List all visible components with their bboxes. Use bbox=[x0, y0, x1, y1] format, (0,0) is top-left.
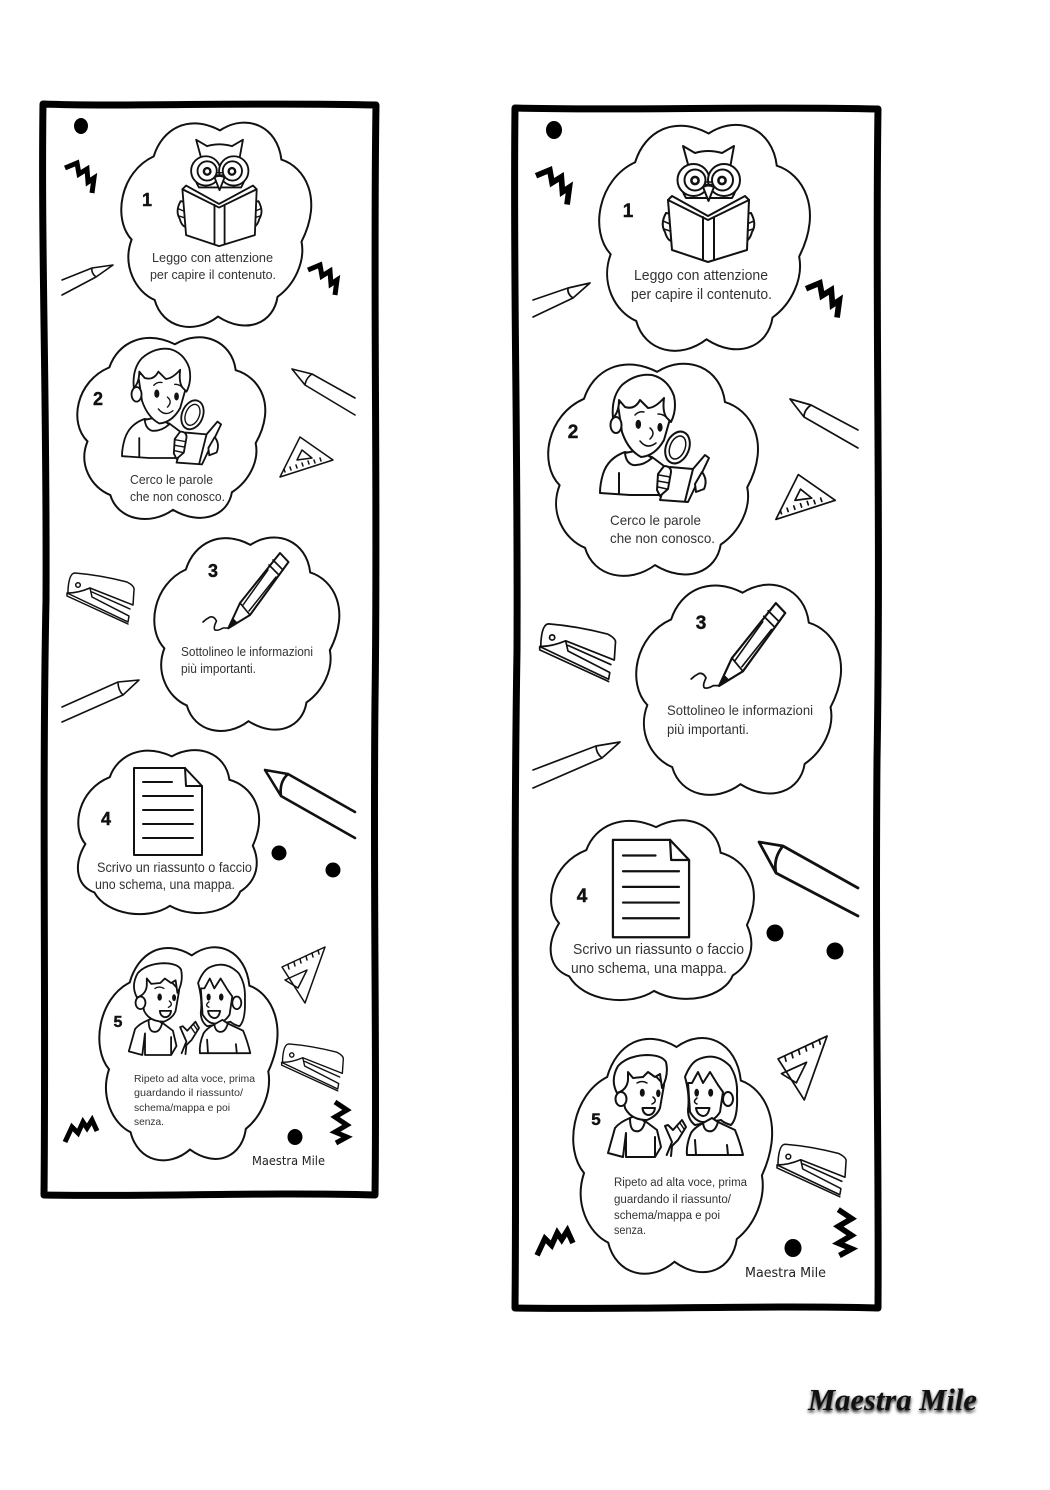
step 2 cloud bbox=[548, 364, 758, 576]
step 3 cloud bbox=[636, 585, 841, 795]
caption 5: senza. bbox=[614, 1225, 646, 1237]
number 4: 4 bbox=[101, 809, 111, 829]
caption 2: che non conosco. bbox=[610, 530, 715, 546]
icon: pencil writing bbox=[691, 603, 785, 688]
caption 1: per capire il contenuto. bbox=[150, 267, 276, 282]
caption 5: schema/mappa e poi bbox=[134, 1102, 230, 1114]
caption 4: uno schema, una mappa. bbox=[571, 960, 727, 977]
step 5 cloud bbox=[99, 947, 277, 1160]
number 5: 5 bbox=[114, 1014, 123, 1031]
icon: document bbox=[134, 768, 202, 855]
panel: left bookmark bbox=[43, 104, 376, 1195]
step 5 cloud bbox=[573, 1038, 772, 1274]
caption 5: schema/mappa e poi bbox=[614, 1210, 720, 1222]
icon: pencil 2 bbox=[292, 369, 355, 415]
decoration: zigzag right of step 1 bbox=[308, 265, 337, 295]
icon: stapler 1 bbox=[67, 573, 134, 624]
number 2: 2 bbox=[93, 389, 103, 409]
icon: owl reading bbox=[663, 146, 754, 262]
icon: stapler 2 bbox=[282, 1044, 343, 1091]
frame: left bookmark border bbox=[43, 104, 376, 1195]
icon: owl reading bbox=[178, 140, 262, 246]
icon: pencil 3 bbox=[533, 742, 620, 788]
decoration: zigzag bottom right bbox=[335, 1102, 347, 1143]
cloud shape bbox=[121, 123, 311, 327]
decoration: zigzag bottom right bbox=[838, 1210, 852, 1256]
step 4 cloud bbox=[78, 750, 259, 914]
cloud shape bbox=[599, 125, 810, 351]
step 2 cloud bbox=[77, 337, 265, 519]
icon: stapler 1 bbox=[540, 624, 616, 682]
caption 3: Sottolineo le informazioni bbox=[667, 702, 813, 718]
icon: set square 1 bbox=[280, 437, 333, 477]
cloud shape bbox=[573, 1038, 772, 1274]
icon: pencil 4 bbox=[265, 770, 355, 838]
number 1: 1 bbox=[623, 201, 634, 222]
icon: boy with magnifier bbox=[600, 375, 709, 502]
decoration: right dots bbox=[546, 121, 844, 1257]
icon: pencil writing bbox=[203, 553, 288, 630]
decoration: zigzag bottom left bbox=[537, 1231, 573, 1255]
decoration: zigzag right of step 1 bbox=[806, 283, 839, 318]
icon: pencil 4 bbox=[759, 842, 858, 916]
caption 5: Ripeto ad alta voce, prima bbox=[134, 1073, 255, 1085]
decoration: zigzag top left bbox=[65, 163, 94, 193]
decoration: zigzag bottom left bbox=[65, 1120, 97, 1142]
caption 2: Cerco le parole bbox=[130, 473, 213, 487]
icon: pencil 2 bbox=[790, 399, 858, 448]
caption 3: Sottolineo le informazioni bbox=[181, 645, 313, 659]
icon: two children talking bbox=[608, 1055, 743, 1157]
panel: right bookmark bbox=[515, 108, 878, 1308]
icon: two children talking bbox=[129, 963, 250, 1055]
cloud shape bbox=[551, 820, 754, 1000]
signature: Maestra Mile bbox=[807, 1382, 977, 1417]
caption 2: che non conosco. bbox=[130, 490, 225, 504]
step 1 cloud bbox=[599, 125, 810, 351]
number 2: 2 bbox=[568, 422, 578, 443]
number 3: 3 bbox=[696, 613, 706, 634]
caption 1: Leggo con attenzione bbox=[634, 267, 768, 284]
caption 4: uno schema, una mappa. bbox=[95, 877, 235, 892]
number 3: 3 bbox=[208, 561, 218, 581]
icon: pencil 1 bbox=[62, 265, 113, 295]
signature: Maestra Mile bbox=[807, 1384, 977, 1419]
caption 5: guardando il riassunto/ bbox=[614, 1194, 732, 1206]
number 1: 1 bbox=[142, 190, 152, 210]
caption 3: più importanti. bbox=[181, 662, 256, 676]
caption 1: Leggo con attenzione bbox=[152, 250, 273, 265]
cloud shape bbox=[548, 364, 758, 576]
frame: right bookmark border bbox=[515, 108, 878, 1308]
icon: set square 1 bbox=[776, 475, 835, 519]
caption 5: senza. bbox=[134, 1116, 164, 1128]
cloud shape bbox=[154, 537, 339, 731]
icon: boy with magnifier bbox=[122, 349, 221, 464]
icon: stapler 2 bbox=[777, 1144, 846, 1197]
decoration: left dots bbox=[74, 118, 340, 1145]
icon: set square 2 bbox=[282, 947, 325, 1003]
credit right: Maestra Mile bbox=[745, 1265, 826, 1281]
caption 3: più importanti. bbox=[667, 721, 749, 737]
step 3 cloud bbox=[154, 537, 339, 731]
caption 1: per capire il contenuto. bbox=[631, 286, 772, 303]
number 5: 5 bbox=[591, 1110, 601, 1129]
caption 2: Cerco le parole bbox=[610, 512, 701, 528]
icon: set square 2 bbox=[778, 1036, 827, 1100]
step 1 cloud bbox=[121, 123, 311, 327]
cloud shape bbox=[78, 750, 259, 914]
cloud shape bbox=[636, 585, 841, 795]
caption 4: Scrivo un riassunto o faccio bbox=[97, 860, 252, 875]
icon: pencil 3 bbox=[62, 680, 139, 722]
icon: document bbox=[613, 840, 689, 937]
caption 5: Ripeto ad alta voce, prima bbox=[614, 1177, 748, 1189]
number 4: 4 bbox=[577, 886, 588, 907]
caption 5: guardando il riassunto/ bbox=[134, 1087, 243, 1099]
icon: pencil 1 bbox=[533, 283, 590, 317]
decoration: zigzag top left bbox=[536, 170, 569, 204]
step 4 cloud bbox=[551, 820, 754, 1000]
cloud shape bbox=[99, 947, 277, 1160]
credit left: Maestra Mile bbox=[252, 1154, 325, 1168]
caption 4: Scrivo un riassunto o faccio bbox=[573, 941, 744, 958]
cloud shape bbox=[77, 337, 265, 519]
